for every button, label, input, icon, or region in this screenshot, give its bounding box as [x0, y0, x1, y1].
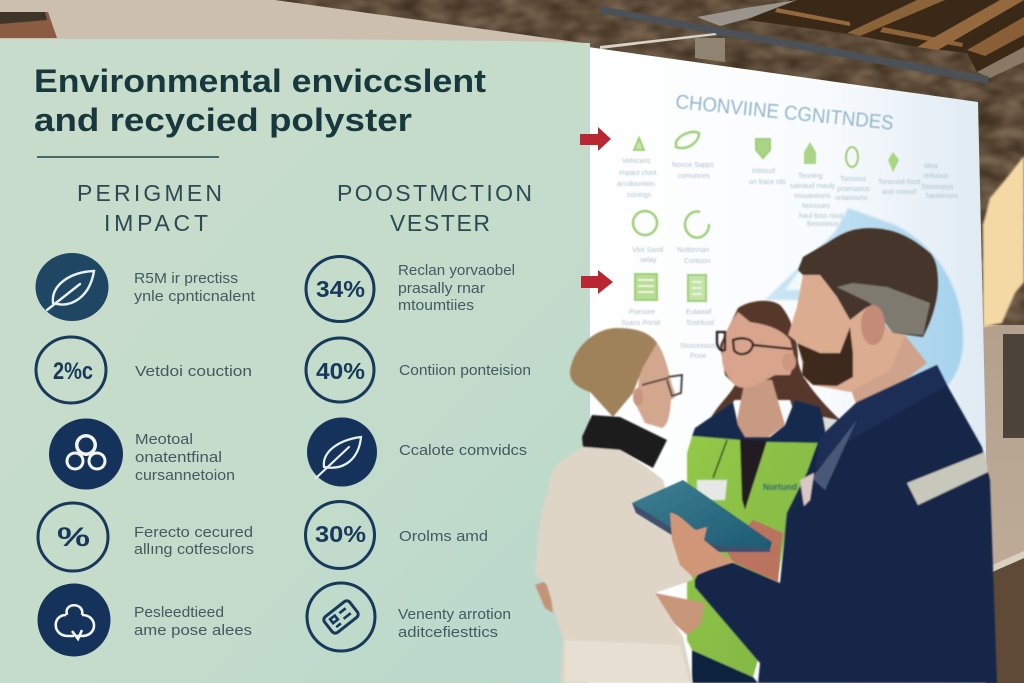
title — [34, 63, 486, 138]
screen icons and captions: selay — [640, 257, 657, 264]
screen icons and captions: Vtor Sand — [632, 247, 663, 254]
screen icons and captions: conings — [627, 192, 652, 199]
screen icons and captions: Besonous — [807, 221, 839, 228]
left row 5: Pesleedtieed — [134, 605, 224, 621]
screen icons and captions: Intocud — [752, 168, 775, 175]
tablet held with hands — [632, 480, 783, 582]
right row 3: Ccalote comvidcs — [399, 443, 527, 459]
screen icons and captions: Pooe — [690, 353, 706, 360]
right row 4 — [306, 502, 488, 568]
screen icons and captions: comunces — [678, 173, 710, 180]
left row 3: onatentfinal — [135, 450, 222, 466]
person: woman in green vest — [687, 301, 840, 683]
right row 5: Venenty arrotion — [398, 607, 511, 623]
left row 1: ynle cpnticnalent — [134, 289, 255, 305]
screen icons and captions: Tostrkuol — [686, 320, 714, 327]
person: woman in white shirt — [535, 328, 705, 683]
screen title: CHONVIINE CGNITNDES — [675, 91, 895, 135]
right row 1: prasally rnar — [398, 281, 485, 297]
screen icons and captions: Syans Porsit — [621, 320, 660, 327]
right row 1: 34% — [316, 276, 365, 302]
title: and recycied polyster — [34, 102, 412, 138]
person: man in navy jacket — [695, 228, 997, 683]
screen icons and captions: haul toso nout — [799, 213, 843, 220]
screen icons and captions: unlanouns — [835, 195, 868, 202]
right row 5: aditcefiesttics — [398, 625, 498, 641]
screen icons and captions: Tonsous — [840, 176, 867, 183]
screen icons and captions: haulances — [926, 193, 958, 200]
column heading: right: VESTER — [390, 210, 490, 236]
screen icons and captions: reduous — [923, 173, 949, 180]
column heading: left — [77, 180, 222, 236]
right row 1: Reclan yorvaobel — [398, 263, 515, 279]
right row 2 — [306, 338, 531, 402]
left row 3 — [49, 418, 235, 490]
screen icons and captions: Idea — [924, 163, 938, 170]
left row 2: 2%c — [53, 358, 93, 385]
left row 4: % — [57, 522, 90, 552]
screen icons and captions: impact clont. — [619, 170, 658, 177]
screen icons and captions: and nowud — [882, 189, 916, 196]
arrow: lower red — [581, 270, 613, 294]
screen icons and captions: accdountion — [617, 181, 655, 188]
screen icons and captions: Contuon — [684, 258, 711, 265]
right row 1 — [306, 256, 515, 322]
projected screen — [588, 47, 986, 683]
screen icons and captions: Tenning — [798, 173, 823, 180]
screen globe graphic — [765, 208, 963, 396]
left row 1: R5M ir prectiss — [134, 271, 238, 287]
screen icons and captions: Nonce Sapps — [672, 162, 715, 169]
screen icons and captions: Nuttonnan — [677, 247, 709, 254]
screen icons and captions — [617, 132, 958, 360]
column heading: right: POOSTMCTION — [337, 180, 532, 206]
right row 1: mtoumtiies — [398, 298, 474, 314]
column heading: right — [337, 180, 532, 236]
left row 2: Vetdoi couction — [135, 364, 252, 380]
column heading: left: IMPACT — [104, 210, 208, 236]
person: woman in green vest: Nortund — [763, 482, 797, 492]
screen icons and captions: Stosoreous — [680, 343, 716, 350]
screen icons and captions: Poesore — [629, 309, 655, 316]
screen icons and captions: Tonouod food — [878, 179, 921, 186]
column heading: left: PERIGMEN — [77, 180, 222, 206]
left row 3: Meotoal — [135, 432, 193, 448]
main poster panel — [0, 39, 590, 683]
screen icons and captions: Nonoues — [802, 203, 831, 210]
screen icons and captions: on trace rds — [749, 179, 786, 186]
screen icons and captions: Eutawaf — [686, 309, 711, 316]
right row 3 — [307, 418, 527, 486]
right row 2: Contiion ponteision — [399, 363, 531, 379]
left row 2 — [36, 337, 252, 403]
right row 4: Orolms amd — [399, 529, 488, 545]
title: Environmental enviccslent — [34, 63, 486, 99]
left row 1 — [36, 253, 255, 321]
screen icons and captions: proesaous — [837, 186, 870, 193]
right row 4: 30% — [315, 521, 366, 547]
left row 3: cursannetoion — [135, 468, 235, 484]
left row 4 — [38, 503, 254, 571]
left row 4: allıng cotfesclors — [134, 542, 254, 558]
screen icons and captions: Vehicans — [622, 158, 651, 165]
arrow: upper red — [580, 127, 611, 151]
right row 2: 40% — [316, 358, 365, 384]
left row 4: Ferecto cecured — [134, 525, 253, 541]
right row 5 — [307, 583, 511, 651]
screen icons and captions: Stoosepys — [921, 184, 954, 191]
screen icons and captions: sainaud mauly — [790, 183, 836, 190]
left row 5 — [38, 584, 252, 656]
screen icons and captions: mouanouns — [794, 193, 831, 200]
left row 5: ame pose alees — [134, 623, 252, 639]
